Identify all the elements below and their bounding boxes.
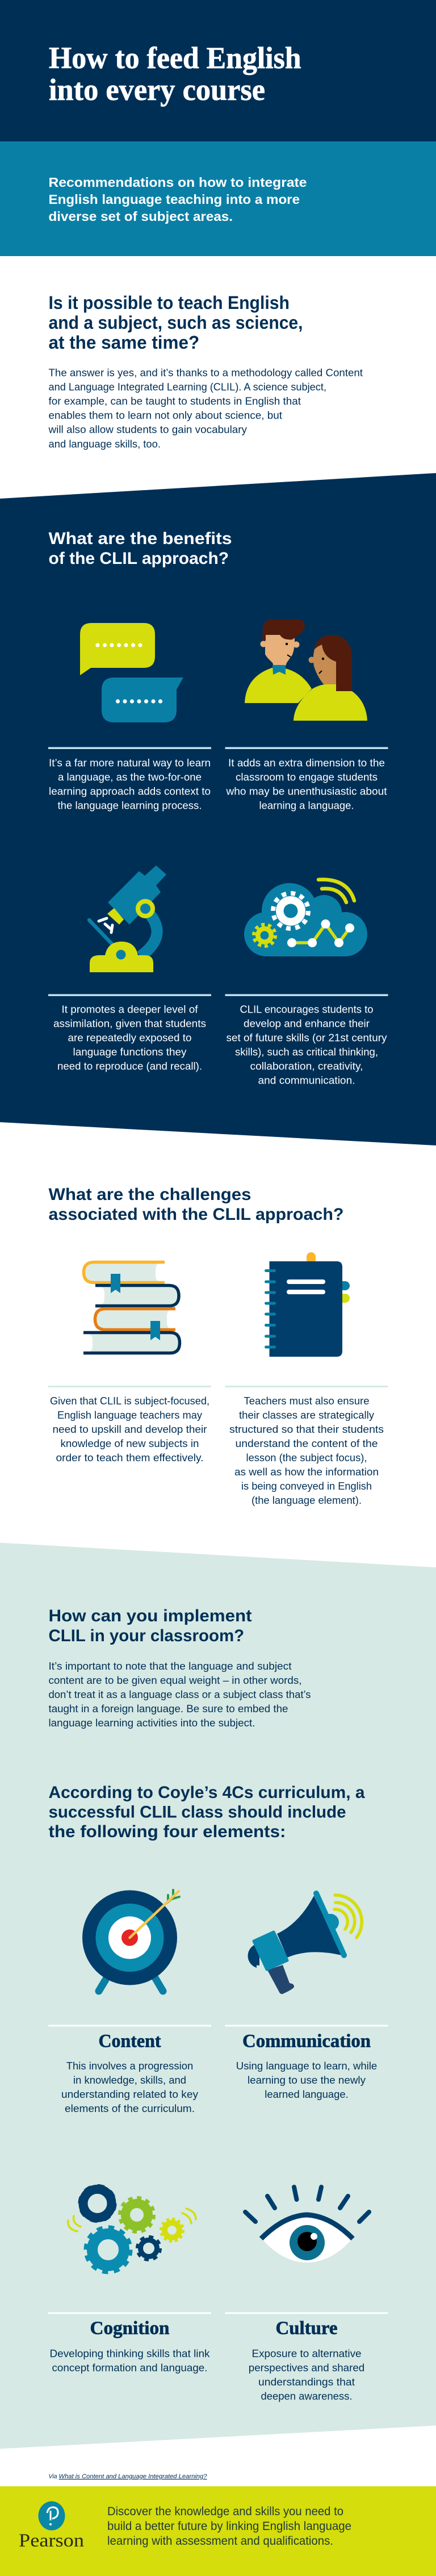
- text block: structured classes: structured so that their students: [229, 1423, 384, 1435]
- panel: subtitle band: [0, 141, 436, 256]
- text block: content description: in knowledge, skills, and: [73, 2074, 186, 2086]
- heading: benefits: [49, 529, 232, 568]
- text block: deeper assimilation: [53, 1003, 206, 1072]
- icon: microscope: [89, 865, 166, 972]
- text block: communication description: learning to use the newly: [248, 2074, 366, 2086]
- text block: structured classes: their classes are strategically: [239, 1409, 375, 1421]
- text block: CLIL intro: enables them to learn not only about science, but: [49, 409, 282, 421]
- text block: natural way: a language, as the two-for-one: [58, 771, 202, 783]
- text block: structured classes: [229, 1395, 384, 1506]
- subtitle text: English language teaching into a more: [49, 192, 300, 207]
- text block: upskill: knowledge of new subjects in: [60, 1437, 199, 1449]
- text block: deeper assimilation: need to reproduce (and recall).: [57, 1060, 202, 1072]
- text block: equal weight: language learning activities into the subject.: [49, 1717, 255, 1729]
- text block: upskill: English language teachers may: [57, 1409, 203, 1421]
- subtitle text: diverse set of subject areas.: [49, 209, 233, 224]
- heading: Content: Content: [99, 2031, 161, 2051]
- title: How to feed English: [49, 41, 301, 75]
- text block: CLIL intro: and Language Integrated Learning (CLIL). A science subject,: [49, 380, 326, 393]
- text block: cognition description: concept formation and language.: [52, 2361, 208, 2374]
- heading: benefits: of the CLIL approach?: [49, 549, 229, 568]
- text block: structured classes: understand the content of the: [235, 1437, 378, 1449]
- text block: future skills: and communication.: [258, 1074, 355, 1086]
- text block: equal weight: don’t treat it as a language class or a subject class that’s: [49, 1688, 311, 1700]
- text block: communication description: Using language to learn, while: [236, 2060, 377, 2072]
- text block: equal weight: [49, 1660, 311, 1729]
- text block: future skills: [226, 1003, 387, 1086]
- logo: Pearson: [19, 2501, 84, 2551]
- call to action text: Discover the knowledge and skills you need to: [107, 2505, 343, 2518]
- text block: future skills: collaboration, creativity,: [250, 1060, 363, 1072]
- divider pair 1: [48, 747, 388, 749]
- text block: upskill: [50, 1395, 209, 1463]
- text block: extra dimension: It adds an extra dimension to the: [228, 756, 385, 769]
- text block: CLIL intro: and language skills, too.: [49, 438, 161, 450]
- panel: header title band: [0, 0, 436, 141]
- icon: two people: [245, 620, 367, 721]
- text block: extra dimension: learning a language.: [259, 800, 354, 811]
- text block: equal weight: It’s important to note that the language and subject: [49, 1660, 292, 1672]
- text block: content description: This involves a progression: [66, 2060, 193, 2072]
- text block: cognition description: [50, 2348, 210, 2374]
- text block: culture description: deepen awareness.: [261, 2390, 352, 2402]
- heading: Coyle's 4Cs: the following four elements:: [49, 1822, 286, 1841]
- title: [49, 41, 301, 107]
- source note: Via: [49, 2473, 57, 2480]
- call to action text: [107, 2505, 351, 2548]
- text block: structured classes: lesson (the subject focus),: [246, 1452, 367, 1463]
- text block: deeper assimilation: are repeatedly exposed to: [68, 1031, 192, 1044]
- text block: content description: [61, 2060, 199, 2114]
- title: into every course: [49, 73, 265, 107]
- heading: Coyle's 4Cs: [49, 1783, 365, 1841]
- text block: future skills: skills), such as critical thinking,: [235, 1046, 378, 1057]
- heading: challenges: [49, 1185, 344, 1224]
- icon: target with arrow: [82, 1890, 179, 1991]
- text block: upskill: Given that CLIL is subject-focused,: [50, 1395, 209, 1407]
- text block: communication description: [236, 2060, 377, 2100]
- panel: implementation: [0, 1542, 436, 2449]
- text block: natural way: learning approach adds context to: [49, 785, 211, 797]
- icon: megaphone: [248, 1893, 362, 1994]
- text block: natural way: the language learning process.: [58, 800, 202, 811]
- text block: future skills: develop and enhance their: [244, 1018, 370, 1029]
- text block: extra dimension: classroom to engage students: [236, 771, 378, 783]
- text block: upskill: order to teach them effectively.: [56, 1452, 203, 1463]
- text block: natural way: It’s a far more natural way to learn: [49, 756, 211, 769]
- text block: structured classes: as well as how the information: [234, 1466, 379, 1478]
- divider pair 5: [48, 2312, 388, 2314]
- text block: deeper assimilation: assimilation, given that students: [53, 1018, 206, 1029]
- heading: Culture: Culture: [276, 2318, 337, 2339]
- divider pair 3: [48, 1386, 388, 1387]
- icon: gears: [68, 2186, 196, 2272]
- text block: equal weight: taught in a foreign language. Be sure to embed the: [49, 1703, 288, 1714]
- text block: future skills: CLIL encourages students to: [240, 1003, 374, 1015]
- text block: CLIL intro: [48, 367, 363, 450]
- text block: equal weight: content are to be given equal weight – in other words,: [49, 1674, 302, 1686]
- text block: natural way: [49, 756, 211, 811]
- heading: implement: [49, 1607, 252, 1645]
- heading: challenges: associated with the CLIL approach?: [49, 1205, 344, 1224]
- subtitle text: Recommendations on how to integrate: [49, 175, 307, 190]
- text block: structured classes: is being conveyed in English: [241, 1480, 372, 1492]
- icon: notebook: [265, 1252, 350, 1357]
- text block: content description: understanding related to key: [61, 2088, 199, 2100]
- logo: Pearson: Pearson: [19, 2531, 84, 2551]
- heading: challenges: What are the challenges: [49, 1185, 251, 1204]
- icon: stack of books: [83, 1262, 180, 1353]
- heading: Coyle's 4Cs: successful CLIL class should include: [49, 1803, 346, 1822]
- call to action text: build a better future by linking English language: [107, 2520, 351, 2533]
- text block: culture description: understandings that: [258, 2376, 355, 2387]
- text block: structured classes: (the language element).: [251, 1494, 362, 1506]
- icon: cloud with gears and graph: [244, 880, 367, 956]
- text block: upskill: need to upskill and develop their: [52, 1423, 207, 1435]
- heading: is it possible: Is it possible to teach English: [49, 292, 290, 313]
- text block: culture description: perspectives and shared: [249, 2361, 364, 2374]
- text block: culture description: [249, 2348, 364, 2402]
- heading: benefits: What are the benefits: [49, 529, 232, 548]
- text block: culture description: Exposure to alternative: [252, 2348, 361, 2359]
- panel: benefits: [0, 473, 436, 1145]
- text block: communication description: learned language.: [265, 2088, 349, 2100]
- text block: CLIL intro: The answer is yes, and it’s thanks to a methodology called Content: [49, 367, 363, 378]
- text block: cognition description: Developing thinking skills that link: [50, 2348, 210, 2359]
- text block: deeper assimilation: It promotes a deeper level of: [61, 1003, 198, 1015]
- divider pair 4: [48, 2025, 388, 2026]
- heading: is it possible: at the same time?: [49, 332, 199, 353]
- text block: deeper assimilation: language functions they: [73, 1046, 187, 1057]
- heading: Coyle's 4Cs: According to Coyle’s 4Cs curriculum, a: [49, 1783, 365, 1802]
- heading: Cognition: Cognition: [90, 2318, 169, 2339]
- subtitle text: [49, 175, 307, 224]
- icon: speech bubbles: [80, 623, 183, 722]
- heading: implement: How can you implement: [49, 1607, 252, 1625]
- text block: extra dimension: who may be unenthusiastic about: [225, 785, 387, 797]
- text block: CLIL intro: for example, can be taught to students in English that: [49, 395, 301, 407]
- text block: future skills: set of future skills (or 21st century: [226, 1031, 387, 1044]
- panel: footer call to action: [0, 2486, 436, 2576]
- heading: Communication: Communication: [242, 2031, 371, 2051]
- text block: extra dimension: [225, 756, 387, 811]
- call to action text: learning with assessment and qualifications.: [107, 2535, 333, 2548]
- heading: implement: CLIL in your classroom?: [49, 1626, 244, 1645]
- heading: is it possible: [49, 292, 303, 353]
- icon: eye: [245, 2187, 369, 2263]
- text block: CLIL intro: will also allow students to gain vocabulary: [48, 424, 248, 435]
- text block: content description: elements of the curriculum.: [65, 2102, 195, 2114]
- divider pair 2: [48, 994, 388, 996]
- heading: is it possible: and a subject, such as science,: [49, 312, 303, 333]
- source note: What is Content and Language Integrated Learning?: [59, 2473, 207, 2480]
- text block: structured classes: Teachers must also ensure: [244, 1395, 369, 1407]
